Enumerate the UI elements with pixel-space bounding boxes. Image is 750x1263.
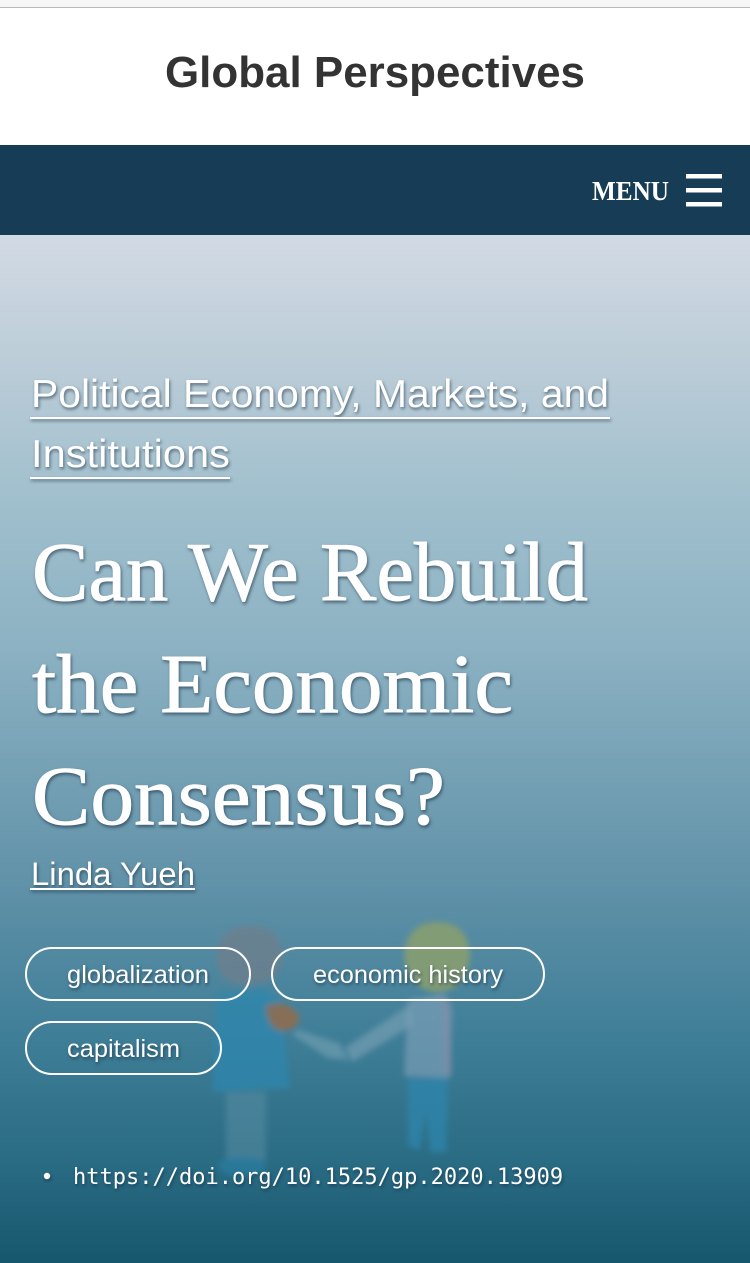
- right figure: [345, 922, 470, 1152]
- browser top strip: [0, 0, 750, 8]
- author link: Linda Yueh: [31, 856, 195, 892]
- icon: hamburger menu: [686, 174, 722, 206]
- tag: economic history: [272, 948, 544, 1000]
- left figure: [213, 926, 348, 1176]
- navigation bar: [0, 145, 750, 235]
- tag: capitalism: capitalism: [67, 1035, 180, 1063]
- tag: globalization: [26, 948, 250, 1000]
- DOI link: https://doi.org/10.1525/gp.2020.13909: [73, 1165, 563, 1190]
- menu label: MENU: [592, 176, 669, 206]
- tag: capitalism: [26, 1022, 221, 1074]
- hero image: two toy figures shaking hands: [213, 922, 470, 1176]
- site header: [0, 8, 750, 145]
- site title: Global Perspectives: [165, 48, 585, 97]
- article title: Can We Rebuild: [32, 526, 588, 619]
- article title: Consensus?: [32, 750, 445, 843]
- article title: [32, 526, 588, 843]
- tag: globalization: globalization: [67, 961, 209, 989]
- category link: Political Economy, Markets, and: [31, 373, 609, 416]
- category link: [30, 373, 610, 479]
- category link: Institutions: [31, 433, 230, 476]
- tag: economic history: economic history: [313, 961, 504, 989]
- article title: the Economic: [32, 638, 513, 731]
